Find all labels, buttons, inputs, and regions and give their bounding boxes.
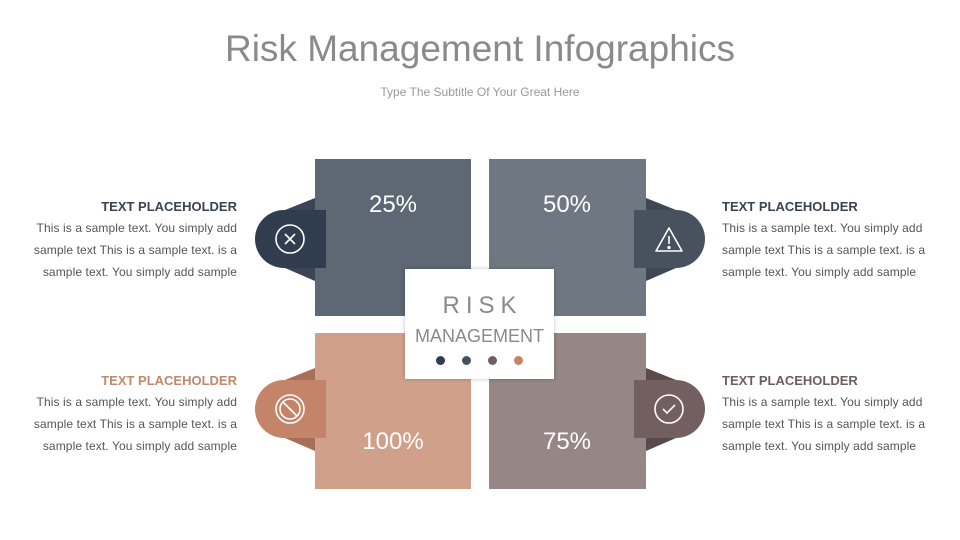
panel: bottom right 75% <box>489 333 705 489</box>
panel: top right 50% <box>489 159 705 316</box>
icon: warning <box>656 228 682 251</box>
icon: check <box>655 395 683 423</box>
text block: bottom left: TEXT PLACEHOLDER <box>101 373 237 388</box>
text block: top left <box>34 199 237 279</box>
RISK text: RISK <box>442 292 522 319</box>
text block: top right: sample text This is a sample text. is a <box>722 243 925 257</box>
text block: top left: sample text. You simply add sample <box>43 265 237 279</box>
text block: bottom right: sample text. You simply add sample <box>722 439 916 453</box>
percent: 75%: 75% <box>543 428 591 455</box>
text block: bottom left: This is a sample text. You simply add <box>37 395 237 409</box>
percent: 25%: 25% <box>369 191 417 218</box>
text block: top left: sample text This is a sample text. is a <box>34 243 237 257</box>
text block: top right: TEXT PLACEHOLDER <box>722 199 858 214</box>
text block: bottom right <box>722 373 926 453</box>
icon: prohibited <box>276 395 304 423</box>
text block: bottom right: This is a sample text. You simply add <box>722 395 922 409</box>
text block: bottom left: sample text. You simply add sample <box>43 439 237 453</box>
panel: top left 25% <box>255 159 471 316</box>
text block: bottom left: sample text This is a sample text. is a <box>34 417 237 431</box>
legend dots <box>436 356 523 365</box>
text block: bottom right: TEXT PLACEHOLDER <box>722 373 858 388</box>
percent: 50%: 50% <box>543 191 591 218</box>
icon: x circle <box>276 225 304 253</box>
text block: top right: sample text. You simply add sample <box>722 265 916 279</box>
center label box <box>405 269 554 379</box>
text block: bottom left <box>34 373 237 453</box>
subtitle: Type The Subtitle Of Your Great Here <box>380 85 580 99</box>
panel: bottom left 100% <box>255 333 471 489</box>
text block: bottom right: sample text This is a sample text. is a <box>722 417 925 431</box>
text block: top left: TEXT PLACEHOLDER <box>101 199 237 214</box>
MANAGEMENT text: MANAGEMENT <box>415 326 544 346</box>
title: Risk Management Infographics <box>225 28 735 69</box>
text block: top right: This is a sample text. You simply add <box>722 221 922 235</box>
percent: 100%: 100% <box>362 428 424 455</box>
text block: top right <box>722 199 926 279</box>
text block: top left: This is a sample text. You simply add <box>37 221 237 235</box>
